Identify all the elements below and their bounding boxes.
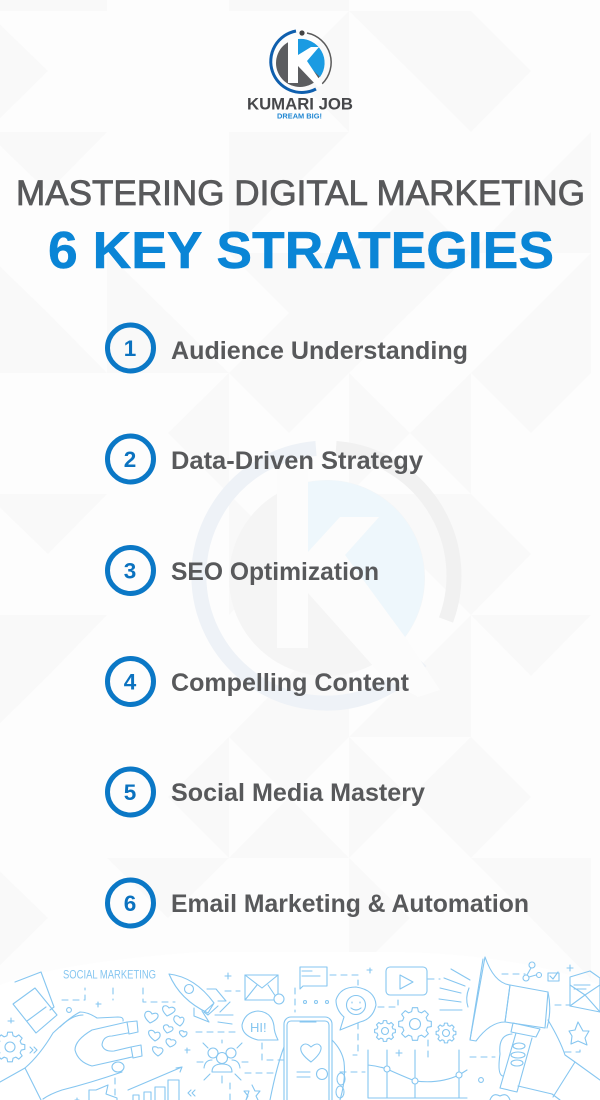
item 6: 6	[124, 891, 136, 916]
item 1	[108, 325, 468, 371]
item 1: 1	[124, 336, 136, 361]
item 5: 5	[124, 780, 136, 805]
watermark K	[277, 470, 440, 697]
watermark rings	[199, 448, 421, 703]
icon: envelope	[245, 975, 284, 1004]
icon: thumbs up	[89, 1085, 117, 1100]
item 2: Data-Driven Strategy	[171, 447, 423, 475]
footer social marketing illustration	[0, 952, 600, 1100]
item 2: 2	[124, 447, 136, 472]
icon: signal rays	[439, 969, 470, 1010]
icon: people network	[197, 1040, 248, 1083]
icon: small star	[244, 1085, 260, 1100]
item 1: Audience Understanding	[171, 337, 468, 365]
decorative connectors	[62, 974, 580, 1100]
strategy list	[108, 325, 529, 926]
title line 1: MASTERING DIGITAL MARKETING	[16, 174, 585, 213]
title line 2: 6 KEY STRATEGIES	[48, 222, 554, 280]
icon: smiley bubble	[336, 987, 376, 1030]
watermark logo	[199, 448, 454, 703]
icon: hand with magnet	[0, 1012, 142, 1100]
icon: rocket	[169, 974, 233, 1024]
item 6: Email Marketing & Automation	[171, 890, 529, 918]
item 3: SEO Optimization	[171, 558, 379, 586]
decorative dots and sparkles	[8, 965, 573, 1100]
item 5: Social Media Mastery	[171, 779, 425, 807]
icon: checkbox	[548, 972, 559, 981]
item 3: 3	[124, 558, 136, 584]
footer white backdrop	[0, 952, 600, 1100]
item 6	[108, 880, 529, 926]
title	[16, 174, 585, 280]
icon: bar chart	[128, 1067, 182, 1100]
item 4: 4	[124, 670, 137, 694]
icon: star	[569, 1022, 589, 1045]
item 4	[108, 658, 410, 704]
watermark disc	[229, 480, 425, 676]
logo wordmark: KUMARI JOB	[247, 94, 353, 114]
icon: cards	[13, 972, 57, 1033]
icon: megaphone	[467, 957, 600, 1100]
item 2	[108, 436, 423, 482]
item 3	[108, 548, 379, 594]
icon: gear left	[0, 1032, 37, 1062]
item 4: Compelling Content	[171, 669, 410, 697]
item 5	[108, 769, 425, 815]
logo mark	[271, 30, 331, 92]
logo tagline: DREAM BIG!	[277, 114, 322, 120]
icon: phone with heart	[270, 1017, 345, 1100]
illustration label: SOCIAL MARKETING	[63, 968, 156, 982]
icon: hearts	[145, 1006, 187, 1056]
icon: open envelope	[570, 971, 600, 1012]
line chart	[368, 1050, 467, 1098]
icon: network node	[523, 962, 542, 981]
icon: video play	[386, 967, 427, 995]
logo	[247, 30, 353, 120]
icon: gears	[375, 1008, 456, 1043]
icon: HI speech bubble: HI!	[250, 1020, 267, 1035]
icon: HI speech bubble	[242, 1011, 278, 1040]
icon: chat box	[300, 967, 327, 989]
